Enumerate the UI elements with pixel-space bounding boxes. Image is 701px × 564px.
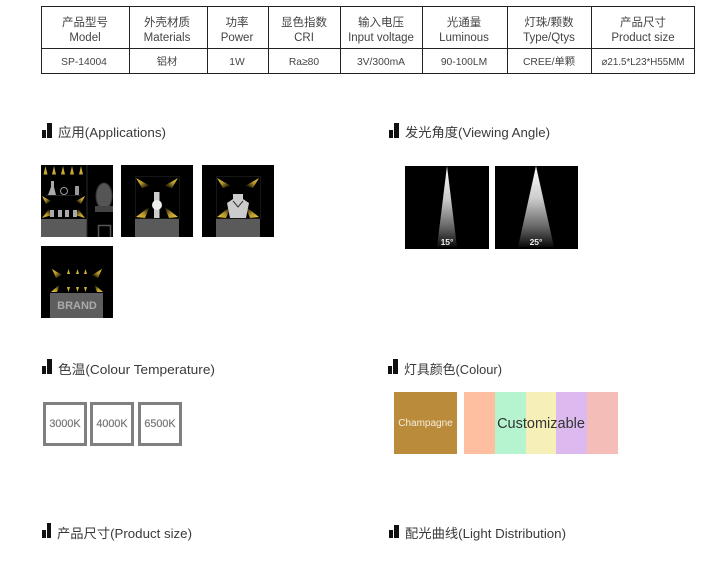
colour temperature swatches: 3000K: [49, 418, 81, 430]
column headers: CRI: [294, 32, 314, 44]
heading: light distribution: 配光曲线(Light Distribution): [405, 526, 566, 541]
column headers: Type/Qtys: [523, 32, 575, 44]
application image: brand display: BRAND: [57, 300, 97, 312]
beam 15 degrees: 15°: [441, 237, 454, 247]
column headers: 功率: [226, 15, 248, 29]
column headers: [62, 15, 675, 44]
swatch: customizable: [464, 392, 618, 454]
spec table: [41, 6, 694, 74]
column headers: Power: [221, 32, 253, 44]
column headers: 光通量: [447, 15, 481, 29]
column headers: 显色指数: [281, 15, 327, 29]
column headers: Model: [69, 32, 101, 44]
column values: 3V/300mA: [357, 57, 405, 68]
column values: 90-100LM: [441, 57, 487, 68]
heading: colour: [388, 359, 502, 377]
column headers: 灯珠/颗数: [524, 15, 574, 29]
column values: 1W: [229, 57, 245, 68]
application image: brand display: [41, 246, 113, 318]
colour temperature swatches: 4000K: [96, 418, 128, 430]
column headers: 产品型号: [62, 15, 108, 29]
swatch: customizable: Customizable: [497, 416, 585, 432]
heading: colour temperature: 色温(Colour Temperature): [58, 361, 215, 377]
column values: 铝材: [157, 55, 177, 68]
column values: ⌀21.5*L23*H55MM: [602, 57, 684, 68]
column headers: 产品尺寸: [620, 15, 666, 29]
swatch: champagne: [394, 392, 457, 454]
colour temperature swatches: [44, 404, 180, 444]
swatch: champagne: Champagne: [398, 418, 453, 429]
beam 25 degrees: 25°: [530, 237, 543, 247]
heading: viewing angle: 发光角度(Viewing Angle): [405, 125, 550, 140]
heading: colour: 灯具颜色(Colour): [404, 361, 502, 377]
colour temperature swatches: 6500K: [144, 418, 176, 430]
column headers: Materials: [144, 32, 191, 44]
application image: necklace: [202, 165, 274, 237]
heading: product size: 产品尺寸(Product size): [57, 526, 192, 541]
application image: cosmetics shelf: [41, 165, 113, 237]
column headers: Product size: [611, 32, 675, 44]
column values: [61, 55, 684, 68]
column headers: Luminous: [439, 32, 489, 44]
beam 25 degrees: [495, 166, 578, 249]
column headers: 输入电压: [358, 15, 404, 29]
column values: Ra≥80: [289, 57, 319, 68]
column values: SP-14004: [61, 57, 107, 68]
beam 15 degrees: [405, 166, 489, 249]
column values: CREE/单颗: [523, 56, 575, 68]
application image: watch: [121, 165, 193, 237]
column headers: 外壳材质: [144, 15, 190, 29]
heading: applications: 应用(Applications): [58, 125, 166, 140]
column headers: Input voltage: [348, 32, 414, 44]
